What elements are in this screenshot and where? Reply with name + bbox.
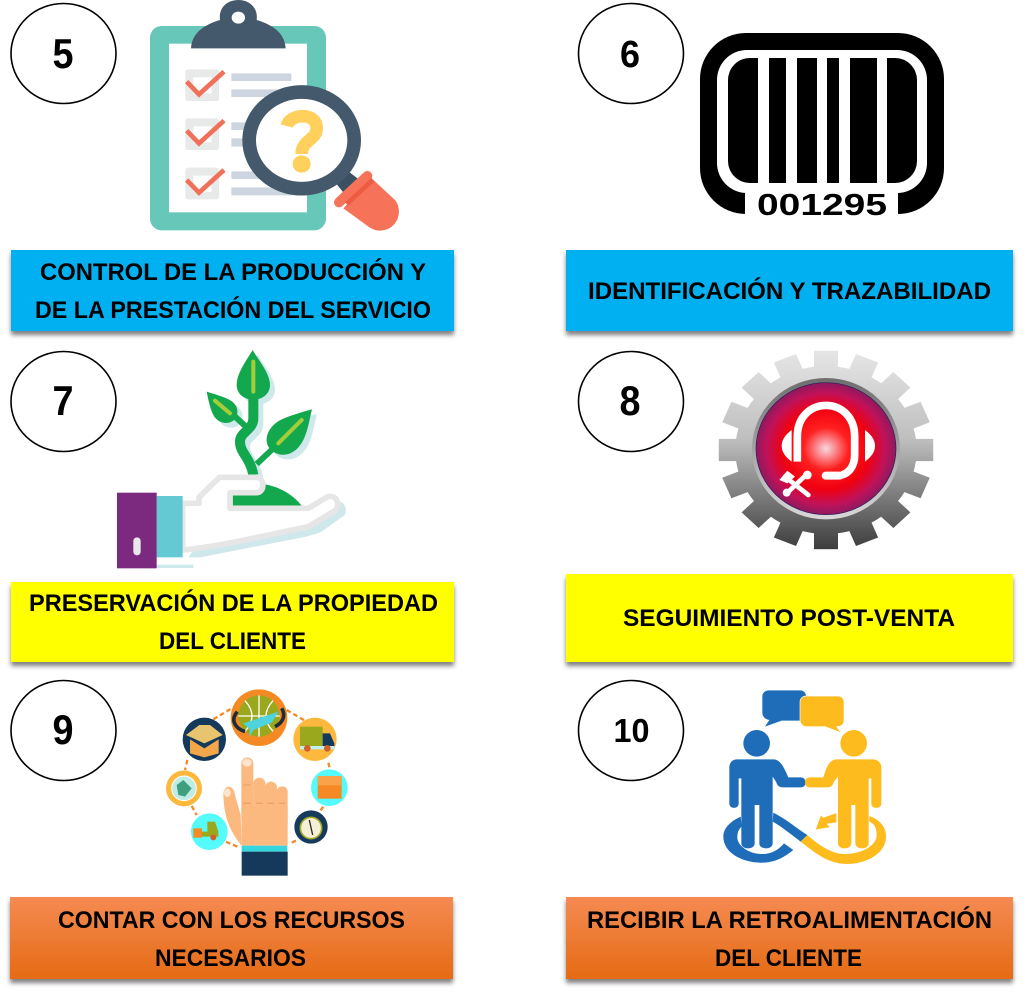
banner: seguimiento post-venta: SEGUIMIENTO POST-VENTA bbox=[623, 605, 955, 632]
banner: control de la producción: DE LA PRESTACIÓN DEL SERVICIO bbox=[35, 296, 431, 324]
number badge 5 bbox=[11, 4, 116, 104]
banner: recibir la retroalimentación bbox=[566, 897, 1013, 979]
icon: hand with logistics circle bbox=[166, 689, 348, 876]
number badge 10 bbox=[578, 680, 684, 780]
banner: identificación y trazabilidad bbox=[566, 250, 1013, 331]
icon: barcode bbox=[700, 33, 944, 222]
number badge 8 bbox=[578, 352, 684, 452]
banner: preservación de la propiedad: DEL CLIENTE bbox=[159, 628, 306, 655]
banner: control de la producción bbox=[11, 250, 454, 331]
number badge 5: 5 bbox=[52, 30, 74, 77]
banner: contar con los recursos: CONTAR CON LOS RECURSOS bbox=[58, 907, 405, 934]
number badge 9: 9 bbox=[52, 706, 74, 753]
number badge 10: 10 bbox=[614, 712, 650, 749]
banner: contar con los recursos: NECESARIOS bbox=[155, 945, 306, 972]
number badge 7: 7 bbox=[52, 377, 74, 424]
number badge 6: 6 bbox=[620, 34, 640, 76]
banner: control de la producción: CONTROL DE LA PRODUCCIÓN Y bbox=[40, 258, 426, 286]
banner: preservación de la propiedad: PRESERVACIÓN DE LA PROPIEDAD bbox=[29, 589, 438, 617]
icon: barcode: 001295 bbox=[757, 187, 887, 222]
icon: clipboard with magnifier bbox=[150, 0, 399, 231]
number badge 7 bbox=[11, 352, 116, 452]
banner: identificación y trazabilidad: IDENTIFICACIÓN Y TRAZABILIDAD bbox=[588, 277, 991, 305]
banner: contar con los recursos bbox=[10, 897, 453, 979]
icon: gear with headset bbox=[713, 347, 940, 553]
icon: two people with feedback loop bbox=[723, 690, 886, 864]
number badge 8: 8 bbox=[620, 377, 640, 424]
icon: plant on hand bbox=[117, 350, 346, 573]
banner: seguimiento post-venta bbox=[566, 574, 1013, 662]
number badge 9 bbox=[11, 680, 116, 780]
banner: recibir la retroalimentación: DEL CLIENTE bbox=[715, 945, 862, 972]
banner: recibir la retroalimentación: RECIBIR LA RETROALIMENTACIÓN bbox=[587, 906, 992, 934]
banner: preservación de la propiedad bbox=[11, 582, 454, 662]
number badge 6 bbox=[578, 4, 684, 104]
